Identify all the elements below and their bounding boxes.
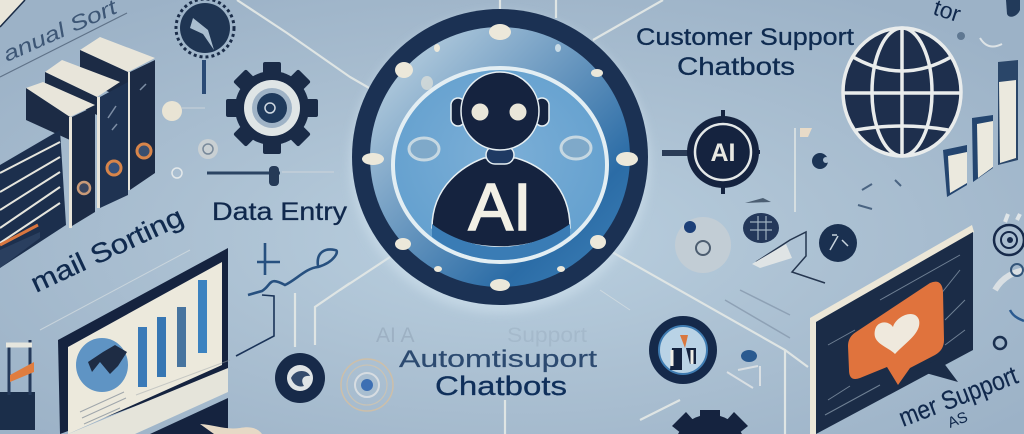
robot figure bbox=[432, 146, 570, 262]
icon: stacked mail slats bbox=[0, 130, 66, 268]
emblem label: AI bbox=[468, 170, 532, 245]
icon: light flower gear bbox=[675, 217, 731, 273]
chart: rising bars bbox=[943, 60, 1018, 197]
label: faded AI automation text bbox=[376, 324, 587, 347]
label: customer support chatbots: Chatbots bbox=[677, 53, 795, 81]
icon: top-left corner sheet bbox=[0, 0, 25, 27]
icon: concentric ring bbox=[341, 359, 393, 411]
icon: small nodes and slider bbox=[162, 101, 334, 186]
icon: mid-right small glyphs bbox=[745, 128, 901, 209]
label: customer support lower right: AS bbox=[945, 409, 970, 432]
icon: top gear bbox=[176, 0, 234, 94]
icon: right edge spiral and clusters bbox=[994, 214, 1024, 349]
icon: AI badge: AI bbox=[710, 139, 736, 167]
icon: AI badge bbox=[662, 110, 760, 194]
icon: analytics monitor bbox=[58, 248, 230, 434]
heart bbox=[875, 314, 919, 354]
icon: settings gear bbox=[226, 62, 318, 154]
icon: bottom gear bbox=[672, 410, 748, 434]
label: automation support chatbots bbox=[399, 346, 597, 401]
rim nodes bbox=[362, 24, 638, 291]
label: mail sorting: mail Sorting bbox=[26, 202, 188, 298]
icon: globe bbox=[843, 28, 961, 156]
label: faded AI automation text: Support bbox=[507, 324, 587, 347]
icon: bottom center small robot bbox=[727, 350, 760, 388]
icon: workflow scribble bbox=[236, 243, 337, 356]
label: faded AI automation text: AI A bbox=[376, 324, 415, 347]
label: automation support chatbots: Automtisuport bbox=[399, 346, 597, 373]
icon: small data badges bbox=[725, 213, 857, 338]
label: customer support chatbots: Customer Support bbox=[636, 24, 854, 51]
label: data entry: Data Entry bbox=[212, 198, 348, 226]
icon: chat support panel bbox=[810, 225, 974, 434]
icon: bottom left round badge bbox=[275, 353, 325, 403]
icon: bottom-left device bbox=[0, 340, 35, 430]
icon: bottom center badge bbox=[649, 316, 717, 384]
speech bubble bbox=[848, 282, 944, 385]
icon: hand cursor bbox=[200, 424, 262, 434]
connector lines bbox=[0, 0, 808, 434]
label: automation support chatbots: Chatbots bbox=[435, 371, 567, 401]
icon: file servers bbox=[26, 37, 155, 228]
label: manual sorting banner: anual Sort bbox=[0, 0, 122, 67]
central AI emblem bbox=[350, 9, 650, 313]
icon: right-side top fragments bbox=[930, 0, 1020, 46]
label: customer support chatbots bbox=[636, 24, 854, 81]
